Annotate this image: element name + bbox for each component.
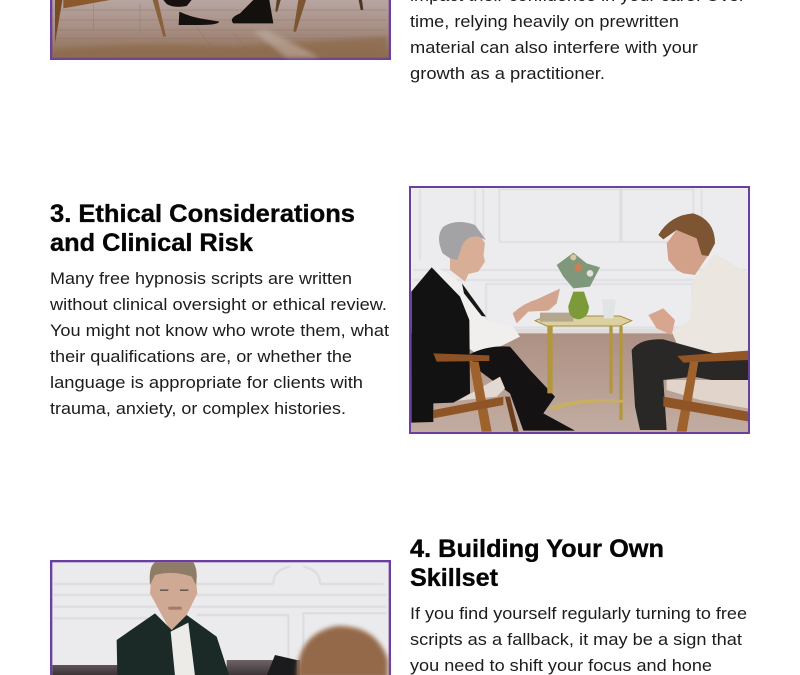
vase and flowers xyxy=(568,292,589,319)
heading: section 4: Skillset xyxy=(410,564,499,592)
text: end of section 2 paragraph xyxy=(410,0,745,83)
heading: section 3: and Clinical Risk xyxy=(50,229,253,257)
woman xyxy=(435,266,520,357)
text: section 3 paragraph: their qualifications are, or whether the xyxy=(50,347,352,366)
bag and blurred head xyxy=(267,655,297,675)
text: end of section 2 paragraph: growth as a practitioner. xyxy=(410,64,605,83)
heading: section 3: 3. Ethical Considerations xyxy=(50,200,355,228)
heading: section 3 xyxy=(50,200,355,257)
text: section 3 paragraph: without clinical oversight or ethical review. xyxy=(49,295,387,314)
text: section 4 paragraph: you need to shift your focus and hone xyxy=(410,656,712,675)
photo: young man in dark shirt, blurred head in foreground xyxy=(50,560,391,675)
text: section 4 paragraph: scripts as a fallback, it may be a sign that xyxy=(410,630,742,649)
shirt xyxy=(117,613,229,675)
text: section 4 paragraph xyxy=(410,604,747,675)
text: section 3 paragraph: trauma, anxiety, or complex histories. xyxy=(50,399,346,418)
man xyxy=(672,253,748,355)
text: end of section 2 paragraph: time, relying heavily on prewritten xyxy=(410,12,679,31)
heading: section 4: 4. Building Your Own xyxy=(410,535,664,563)
photo: therapist and client seated at a table xyxy=(409,186,750,434)
text: section 3 paragraph xyxy=(49,269,389,418)
text: section 3 paragraph: You might not know who wrote them, what xyxy=(50,321,389,340)
heading: section 4 xyxy=(410,535,664,592)
photo: floor with chair legs and shoes xyxy=(50,0,391,60)
text: end of section 2 paragraph: material can also interfere with your xyxy=(410,38,698,57)
table xyxy=(535,316,632,326)
text: section 4 paragraph: If you find yourself regularly turning to free xyxy=(410,604,747,623)
face xyxy=(150,570,197,630)
text: section 3 paragraph: Many free hypnosis scripts are written xyxy=(50,269,352,288)
text: section 3 paragraph: language is appropriate for clients with xyxy=(50,373,363,392)
